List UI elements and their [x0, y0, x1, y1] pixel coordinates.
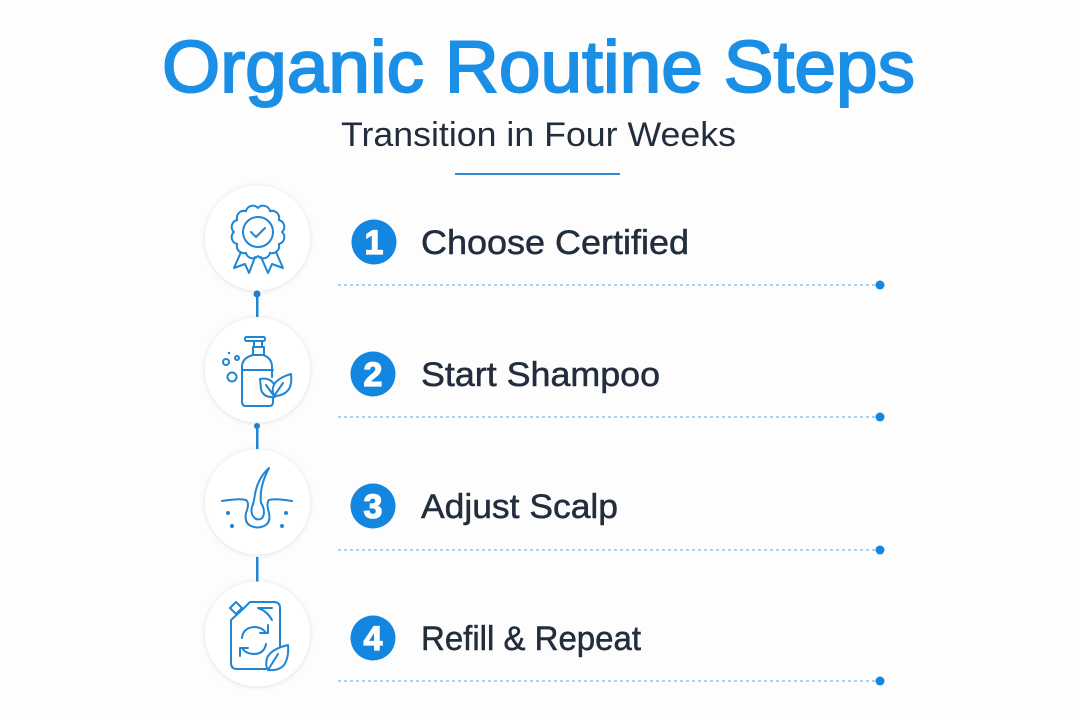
connector: step 3 to 4 [256, 557, 258, 582]
dotted rule 2 [338, 412, 884, 422]
dotted rule 4 [338, 676, 884, 686]
number badge 4: 4 [364, 620, 383, 658]
step 3 [205, 450, 884, 554]
step 1 [205, 186, 884, 290]
title divider [455, 173, 620, 175]
icon: certified rosette [205, 186, 310, 290]
number badge 1: 1 [365, 224, 383, 262]
label 2: Start Shampoo [421, 356, 660, 394]
icon: refill pouch with leaf [205, 582, 310, 686]
number badge 1 [352, 220, 396, 264]
dotted rule 3 [338, 546, 884, 554]
step 2 [205, 318, 884, 422]
number badge 2: 2 [364, 356, 382, 394]
number badge 2 [350, 352, 396, 396]
icon: shampoo bottle with leaf [205, 318, 310, 422]
connector: step 2 to 3 [254, 423, 260, 449]
number badge 3: 3 [364, 488, 382, 526]
step 4 [205, 582, 884, 686]
title: Organic Routine Steps [162, 27, 915, 108]
icon: hair follicle [205, 450, 310, 554]
label 1: Choose Certified [421, 224, 689, 262]
number badge 3 [350, 484, 396, 528]
number badge 4 [350, 616, 396, 660]
label 3: Adjust Scalp [421, 488, 618, 526]
subtitle: Transition in Four Weeks [341, 116, 736, 154]
dotted rule 1 [338, 280, 884, 290]
label 4: Refill & Repeat [421, 620, 642, 658]
connector: step 1 to 2 [254, 290, 260, 317]
